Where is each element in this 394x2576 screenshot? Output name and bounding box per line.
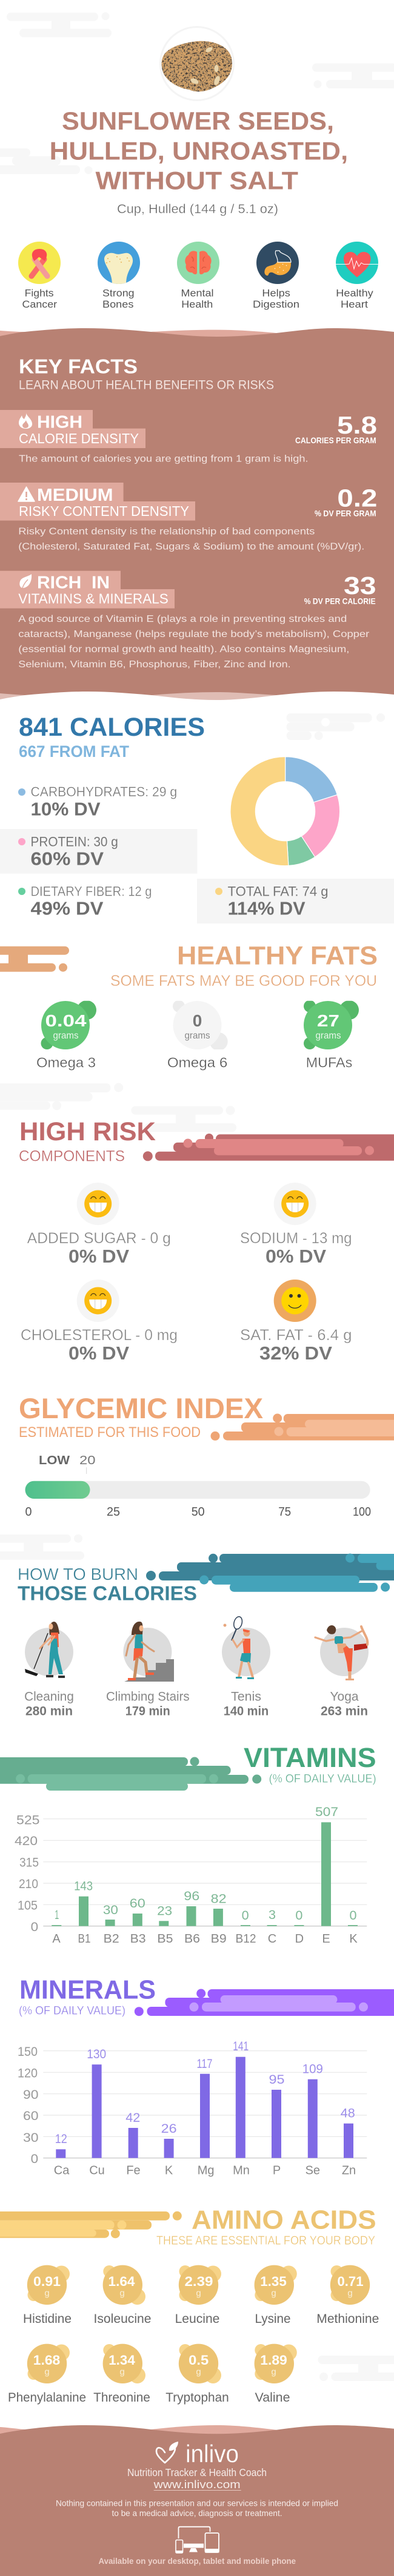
amino acid: valine	[255, 2344, 297, 2405]
legend: carbohydrates: 10% DV	[30, 799, 101, 820]
amino acid: phenylalanine: 1.68	[33, 2353, 60, 2368]
bar chart: vitamins: 105	[18, 1899, 38, 1912]
label: mental health: Health	[181, 299, 213, 310]
bar chart: vitamins: 0	[295, 1909, 302, 1923]
risk item: cholesterol: 0% DV	[68, 1342, 129, 1364]
stat: calories per gram	[295, 411, 377, 445]
amino acid: leucine: 2.39	[184, 2274, 213, 2289]
risk item: sodium: SODIUM - 13 mg	[240, 1230, 352, 1247]
subheading: key facts: LEARN ABOUT HEALTH BENEFITS OR RISKS	[19, 378, 274, 392]
risk item: cholesterol: CHOLESTEROL - 0 mg	[21, 1327, 178, 1344]
label: fights cancer: Fights	[25, 287, 54, 299]
amino acid: leucine: g	[196, 2288, 201, 2299]
bar chart: vitamins: 143	[74, 1880, 93, 1893]
bar chart: minerals: 30	[23, 2131, 39, 2145]
decoration: minerals bars	[135, 1989, 394, 2016]
activity minutes: 179 min	[125, 1705, 170, 1719]
bar chart: vitamins: B3	[130, 1932, 146, 1946]
stat: percent dv per calorie: 33	[344, 572, 376, 599]
text: risky content description	[18, 527, 364, 552]
heading: glycemic index: GLYCEMIC INDEX	[19, 1392, 263, 1424]
subheading: percent of daily value: (% OF DAILY VALUE)	[269, 1772, 376, 1785]
bar chart: vitamins: E	[322, 1932, 330, 1946]
amino acid: valine: g	[271, 2367, 276, 2377]
activity labels: Tenis	[231, 1689, 261, 1703]
glycemic scale labels: 50	[192, 1505, 205, 1519]
label: healthy heart	[336, 287, 373, 310]
amino acid: leucine	[175, 2265, 221, 2326]
fat item: MUFAs: 27	[317, 1011, 339, 1030]
legend: protein	[18, 834, 118, 869]
bar chart: vitamins: 82	[211, 1892, 227, 1906]
decoration: healthy fats bars	[0, 946, 69, 972]
stat: percent dv per gram	[315, 484, 377, 518]
icon: strong bones	[98, 242, 140, 285]
bar chart: minerals: 48	[341, 2106, 355, 2121]
bar chart: vitamins: 23	[157, 1904, 172, 1918]
badge: rich in vitamins and minerals: RICH IN	[37, 573, 110, 593]
logo: inlivo	[156, 2440, 239, 2468]
amino acid: methionine: g	[347, 2288, 353, 2299]
icon: desktop, tablet and phone	[176, 2527, 219, 2553]
stat: percent dv per gram: 0.2	[337, 484, 377, 512]
bar chart: vitamins: 525	[16, 1813, 40, 1828]
bar chart: vitamins: B1	[78, 1932, 91, 1946]
amino acid: methionine: 0.71	[337, 2274, 364, 2289]
fat item: omega 6: 0	[193, 1011, 202, 1030]
glycemic scale labels: 75	[278, 1505, 291, 1519]
heading: key facts: KEY FACTS	[19, 355, 138, 378]
fat item: MUFAs: MUFAs	[306, 1055, 352, 1071]
amino acid: valine: 1.89	[260, 2353, 287, 2368]
icon: helps digestion	[256, 242, 299, 284]
label: healthy heart: Healthy	[336, 287, 373, 299]
bar chart: vitamins: 0	[31, 1920, 38, 1934]
amino acid: threonine: g	[119, 2367, 125, 2377]
badge: high calorie density: CALORIE DENSITY	[19, 431, 139, 446]
amino acid: tryptophan: Tryptophan	[165, 2391, 229, 2405]
amino acid: lysine	[255, 2265, 297, 2326]
bar chart: vitamins: D	[295, 1932, 304, 1946]
legend: carbohydrates	[18, 784, 177, 820]
fat item: omega 6: grams	[184, 1031, 210, 1041]
food image: sunflower seeds	[160, 27, 234, 101]
glycemic scale labels	[25, 1505, 371, 1519]
amino acid: phenylalanine: Phenylalanine	[8, 2391, 86, 2405]
activity: yoga	[315, 1625, 369, 1680]
badge: high calorie density: HIGH	[37, 413, 82, 432]
text: disclaimer: Nothing contained in this presentation and our services is intended or implied	[56, 2498, 338, 2508]
decoration: vitamins bars	[0, 1757, 261, 1791]
risk item: saturated fat: 32% DV	[259, 1342, 332, 1364]
fat item: omega 3: Omega 3	[36, 1055, 96, 1071]
bar chart: minerals: 12	[55, 2132, 67, 2146]
amino acid: lysine: g	[271, 2288, 276, 2299]
bar chart: minerals: Mg	[198, 2164, 214, 2178]
amino acid: tryptophan: 0.5	[189, 2353, 209, 2368]
risk item: added sugar: ADDED SUGAR - 0 g	[27, 1230, 171, 1247]
glycemic value label	[39, 1454, 96, 1474]
risk item: sodium	[240, 1183, 352, 1267]
panel: protein row background	[0, 829, 198, 874]
label: strong bones: Bones	[102, 299, 133, 310]
risk item: saturated fat	[240, 1280, 352, 1364]
label: healthy heart: Heart	[341, 299, 368, 310]
label: helps digestion: Digestion	[253, 299, 299, 310]
risk item: added sugar: 0% DV	[68, 1246, 129, 1267]
subheading: healthy fats: SOME FATS MAY BE GOOD FOR YOU	[110, 973, 377, 989]
activity labels: Yoga	[330, 1689, 359, 1703]
bar chart: vitamins: 0	[242, 1909, 249, 1923]
stat: percent dv per gram: % DV PER GRAM	[315, 509, 376, 518]
title: HULLED, UNROASTED,	[50, 137, 348, 165]
stat: percent dv per calorie: % DV PER CALORIE	[304, 596, 376, 606]
title	[50, 107, 348, 195]
bar chart: vitamins: 3	[269, 1908, 276, 1922]
icon: healthy heart	[336, 242, 378, 284]
text: vitamins and minerals description: (essential for normal growth and health). Also contains Magnesium,	[18, 644, 349, 655]
badge: high calorie density	[0, 410, 145, 448]
risk item: saturated fat: SAT. FAT - 6.4 g	[240, 1327, 352, 1344]
background cloud: mid left	[0, 148, 92, 174]
bar chart: vitamins: 30	[103, 1903, 118, 1917]
text: vitamins and minerals description: Selenium, Vitamin B6, Phosphorus, Fiber, Zinc and Iron.	[18, 659, 291, 670]
amino acid: isoleucine	[93, 2265, 152, 2326]
bar chart: vitamins: B5	[157, 1932, 173, 1946]
label: helps digestion	[253, 287, 299, 310]
subheading: 667 from fat: 667 FROM FAT	[19, 742, 129, 761]
bar chart: minerals: 117	[196, 2057, 212, 2071]
glycemic value label: 20	[79, 1454, 96, 1467]
icon: fights cancer	[18, 242, 61, 284]
subheading: estimated for this food: ESTIMATED FOR THIS FOOD	[19, 1424, 201, 1441]
decoration: how to burn bars	[146, 1554, 394, 1592]
text: calorie density description: The amount of calories you are getting from 1 gram is high.	[19, 454, 309, 464]
text: vitamins and minerals description	[18, 614, 370, 670]
background cloud: calories	[287, 713, 385, 740]
bar chart: vitamins: B6	[184, 1932, 200, 1946]
bar chart: vitamins: 0	[349, 1909, 356, 1923]
heading: amino acids: AMINO ACIDS	[192, 2205, 376, 2235]
bar chart: minerals: Fe	[126, 2164, 141, 2178]
badge: medium risky content density: RISKY CONTENT DENSITY	[19, 503, 189, 519]
amino acid: histidine	[23, 2265, 72, 2326]
subheading: components: COMPONENTS	[19, 1148, 125, 1165]
title: WITHOUT SALT	[96, 166, 298, 195]
background cloud: top right	[312, 64, 394, 88]
legend: total fat: 114% DV	[228, 898, 306, 919]
legend: protein: 60% DV	[30, 848, 104, 869]
amino acid: leucine: Leucine	[175, 2312, 219, 2326]
label: strong bones	[102, 287, 135, 310]
activity: cleaning	[25, 1622, 73, 1678]
bar chart: vitamins: 96	[184, 1889, 199, 1903]
icon: mental health	[177, 242, 219, 284]
amino acid: isoleucine: g	[119, 2288, 125, 2299]
activity labels: Climbing Stairs	[106, 1689, 190, 1703]
amino acid: threonine: 1.34	[109, 2353, 136, 2368]
bar chart: minerals: 150	[18, 2045, 38, 2059]
bar chart: vitamins: 1	[55, 1908, 59, 1922]
amino acid: phenylalanine: g	[44, 2367, 50, 2377]
risk item: sodium: 0% DV	[265, 1246, 326, 1267]
activity labels	[24, 1689, 359, 1703]
glycemic value label: LOW	[39, 1454, 70, 1467]
amino acid: isoleucine: Isoleucine	[93, 2312, 152, 2326]
bar chart: minerals: P	[273, 2164, 281, 2178]
text: risky content description: (Cholesterol, Saturated Fat, Sugars & Sodium) to the amount (%DV/gr).	[18, 541, 364, 552]
badge: rich in vitamins and minerals	[0, 571, 175, 609]
risk item: added sugar	[27, 1183, 171, 1267]
fat item: omega 6: Omega 6	[167, 1055, 227, 1071]
activity minutes: 280 min	[25, 1705, 73, 1719]
link: website: www.inlivo.com	[153, 2479, 241, 2491]
fat item: omega 3: grams	[53, 1031, 79, 1041]
activity minutes: 140 min	[224, 1705, 269, 1719]
bar chart: vitamins: 60	[130, 1897, 145, 1911]
decoration: amino acids bars	[0, 2211, 182, 2238]
legend: dietary fiber	[18, 883, 152, 919]
amino acid: histidine: Histidine	[23, 2312, 72, 2326]
bar chart: vitamins: 420	[15, 1834, 38, 1848]
amino acid: isoleucine: 1.64	[108, 2274, 135, 2289]
label: fights cancer	[22, 287, 57, 310]
fat item: MUFAs: grams	[315, 1031, 341, 1041]
text: nutrition tracker tagline: Nutrition Tracker & Health Coach	[127, 2466, 267, 2479]
bar chart: vitamins: B12	[235, 1932, 256, 1946]
stat: calories per gram: CALORIES PER GRAM	[295, 435, 376, 445]
fat item: MUFAs	[304, 1000, 359, 1071]
background cloud: top left	[7, 12, 112, 38]
activity: climbing stairs	[123, 1622, 174, 1682]
amino acid: threonine: Threonine	[93, 2391, 150, 2405]
heading: 841 calories: 841 CALORIES	[19, 713, 205, 742]
glycemic index bar	[25, 1481, 370, 1499]
bar chart: minerals: 42	[125, 2111, 140, 2125]
fat item: omega 6	[167, 1000, 228, 1071]
activity minutes	[25, 1705, 368, 1719]
bar chart: minerals	[18, 2039, 367, 2178]
bar chart: minerals: 130	[87, 2047, 106, 2061]
bar chart: minerals: 0	[31, 2152, 38, 2166]
bar chart: vitamins: 507	[315, 1805, 338, 1819]
bar chart: minerals: 95	[269, 2073, 285, 2087]
amino acid: methionine	[316, 2265, 379, 2326]
legend: carbohydrates: CARBOHYDRATES: 29 g	[30, 784, 177, 799]
text: availability: Available on your desktop, tablet and mobile phone	[98, 2556, 296, 2566]
donut chart: macronutrients	[230, 757, 340, 866]
label: mental health	[181, 287, 213, 310]
legend: total fat: TOTAL FAT: 74 g	[228, 883, 329, 899]
background cloud: before high risk centre	[131, 1106, 236, 1132]
amino acid: threonine	[93, 2344, 150, 2405]
bar chart: vitamins: K	[349, 1932, 358, 1946]
label: strong bones: Strong	[102, 287, 135, 299]
fat item: omega 3	[36, 1000, 96, 1071]
amino acid: methionine: Methionine	[316, 2312, 379, 2326]
amino acid: phenylalanine	[8, 2344, 86, 2405]
bar chart: vitamins: B2	[104, 1932, 119, 1946]
bar chart: vitamins: 210	[19, 1877, 38, 1891]
heading: high risk: HIGH RISK	[19, 1117, 156, 1146]
bar chart: minerals: Se	[306, 2164, 320, 2178]
bar chart: vitamins: B9	[211, 1932, 227, 1946]
label: mental health: Mental	[181, 287, 213, 299]
decoration: high risk bars	[143, 1134, 394, 1161]
badge: medium risky content density	[0, 483, 195, 521]
bar chart: minerals: 90	[23, 2088, 39, 2102]
bar chart: minerals: Ca	[54, 2164, 70, 2178]
bar chart: minerals: K	[165, 2164, 173, 2178]
amino acid: tryptophan	[165, 2344, 229, 2405]
bar chart: vitamins: A	[52, 1932, 61, 1946]
heading: how to burn those calories	[18, 1565, 197, 1605]
bar chart: minerals: 141	[233, 2039, 249, 2053]
panel: key facts background wave	[0, 328, 394, 700]
bar chart: minerals: Zn	[342, 2164, 356, 2178]
bar chart: minerals: 60	[23, 2109, 39, 2123]
heading: healthy fats: HEALTHY FATS	[177, 942, 378, 971]
legend: total fat	[215, 883, 329, 919]
text: risky content description: Risky Content density is the relationship of bad components	[18, 527, 315, 537]
bar chart: minerals: Cu	[89, 2164, 105, 2178]
glycemic scale labels: 100	[353, 1505, 371, 1519]
legend: protein: PROTEIN: 30 g	[30, 834, 118, 849]
background cloud: burn	[0, 1534, 84, 1560]
text: vitamins and minerals description: A good source of Vitamin E (plays a role in preventing strokes and	[18, 614, 347, 624]
title: SUNFLOWER SEEDS,	[62, 107, 334, 135]
text: disclaimer	[56, 2498, 338, 2518]
stat: calories per gram: 5.8	[337, 411, 377, 439]
amino acid: lysine: 1.35	[260, 2274, 287, 2289]
fat item: omega 3: 0.04	[45, 1011, 87, 1030]
amino acid: histidine: 0.91	[33, 2274, 61, 2289]
amino acid: lysine: Lysine	[255, 2312, 291, 2326]
text: vitamins and minerals description: cataracts), Manganese (helps regulate the body’s metabolism), Copper	[18, 629, 370, 639]
bar chart: minerals: 26	[161, 2122, 177, 2136]
amino acid: valine: Valine	[255, 2391, 290, 2405]
panel: footer background wave	[0, 2425, 394, 2576]
amino acid: tryptophan: g	[196, 2367, 201, 2377]
bar chart: vitamins: C	[268, 1932, 276, 1946]
badge: rich in vitamins and minerals: VITAMINS & MINERALS	[18, 591, 169, 607]
background cloud: before high risk left	[0, 1083, 123, 1110]
activity minutes: 263 min	[321, 1705, 368, 1719]
bar chart: vitamins	[15, 1805, 367, 1946]
panel: total fat row background	[197, 879, 394, 923]
heading: how to burn those calories: HOW TO BURN	[18, 1565, 138, 1584]
label: helps digestion: Helps	[262, 287, 290, 299]
glycemic scale labels: 25	[107, 1505, 120, 1519]
glycemic scale labels: 0	[25, 1505, 32, 1519]
bar chart: vitamins: 315	[19, 1855, 39, 1870]
heading: minerals: MINERALS	[19, 1975, 156, 2005]
logo: inlivo: inlivo	[185, 2440, 239, 2468]
bar chart: minerals: 109	[302, 2062, 323, 2076]
serving size: Cup, Hulled (144 g / 5.1 oz)	[117, 202, 278, 216]
background cloud: amino acids	[318, 2356, 394, 2381]
bar chart: minerals: 120	[18, 2066, 38, 2081]
legend: dietary fiber: DIETARY FIBER: 12 g	[30, 883, 152, 899]
heading: vitamins: VITAMINS	[244, 1742, 376, 1773]
decoration: glycemic index bars	[211, 1413, 394, 1441]
activity: tennis	[222, 1616, 270, 1679]
label: fights cancer: Cancer	[22, 299, 57, 310]
stat: percent dv per calorie	[304, 572, 376, 606]
amino acid: histidine: g	[44, 2288, 50, 2299]
subheading: essential for your body: THESE ARE ESSENTIAL FOR YOUR BODY	[156, 2234, 375, 2248]
legend: dietary fiber: 49% DV	[30, 898, 104, 919]
risk item: cholesterol	[21, 1280, 178, 1364]
badge: medium risky content density: MEDIUM	[37, 486, 113, 505]
subheading: minerals percent of daily value: (% OF DAILY VALUE)	[19, 2005, 125, 2018]
heading: how to burn those calories: THOSE CALORIES	[18, 1582, 197, 1605]
activity labels: Cleaning	[24, 1689, 74, 1703]
text: disclaimer: to be a medical advice, diagnosis or treatment.	[112, 2508, 282, 2518]
bar chart: minerals: Mn	[233, 2164, 250, 2178]
